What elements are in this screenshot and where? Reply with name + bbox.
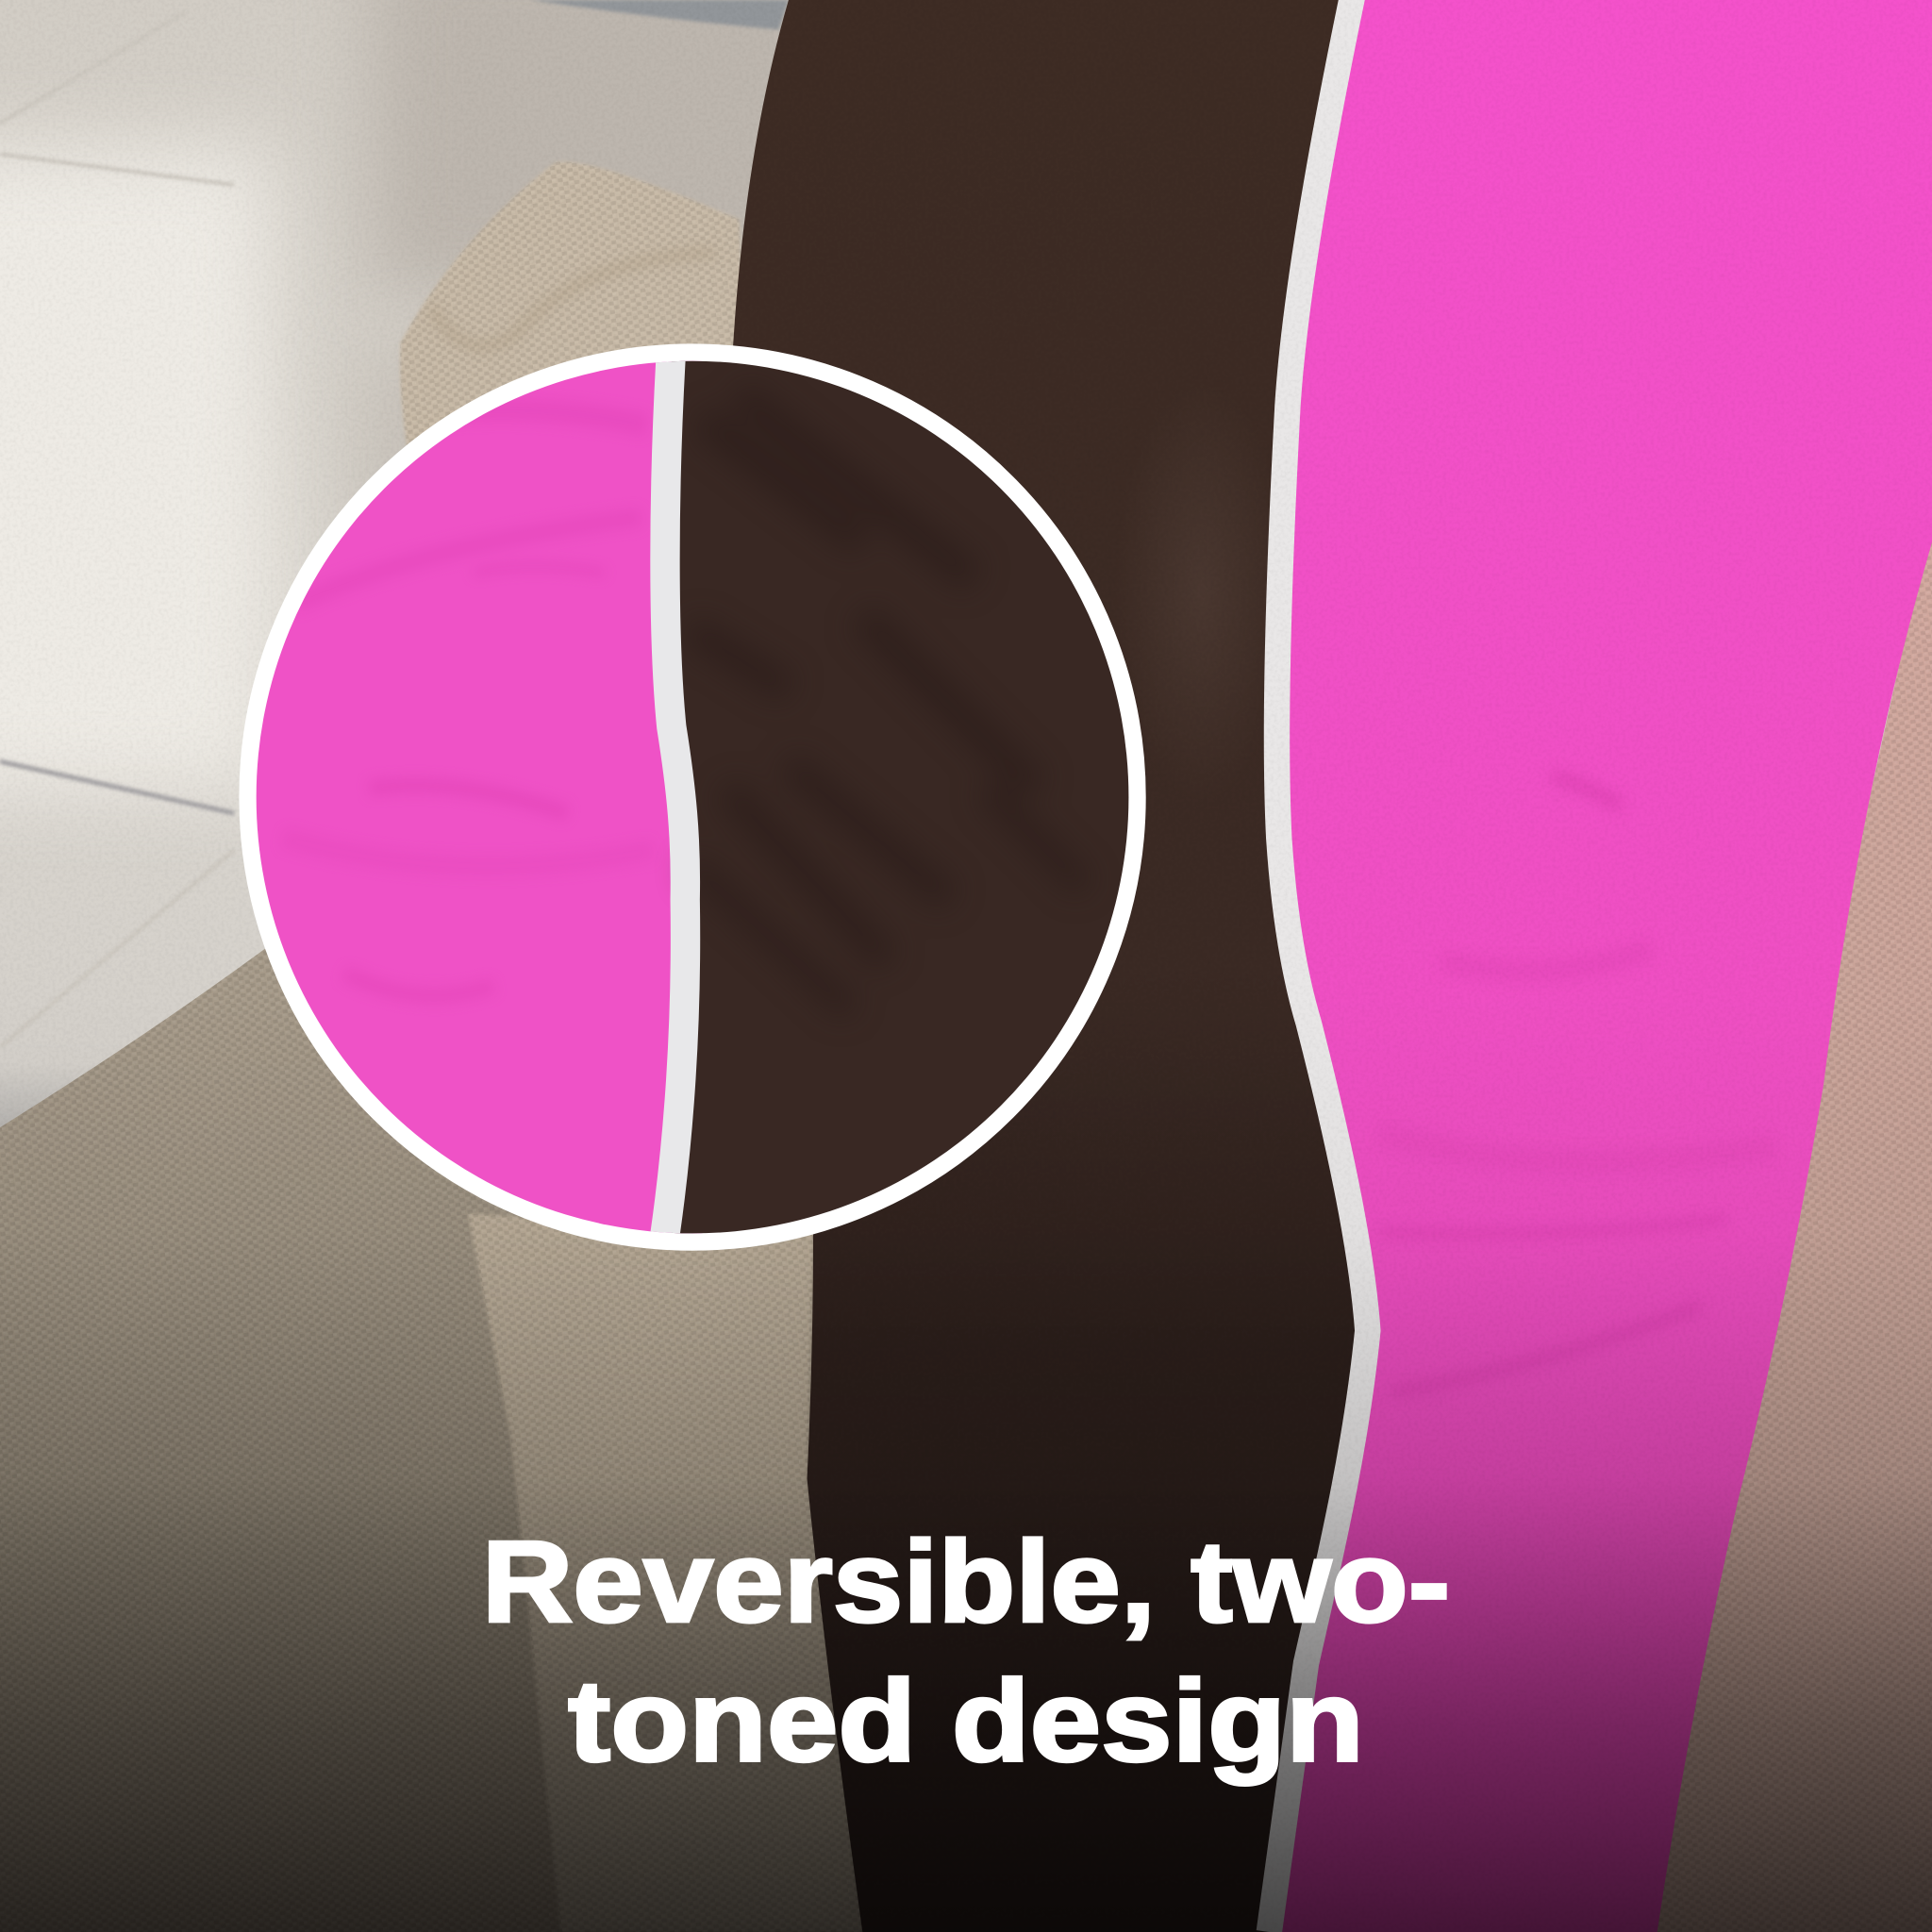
lighter cushion panel — [468, 1214, 862, 1932]
pink pillow — [1269, 0, 1932, 1932]
headline — [482, 1518, 1450, 1786]
white piping on pillow — [1269, 0, 1368, 1932]
zoomed white piping — [661, 345, 686, 1257]
magnified detail circle — [246, 345, 1164, 1257]
zoomed brown shading — [670, 868, 671, 874]
bottom dark gradient overlay — [0, 986, 1932, 1932]
pink fabric folds — [1380, 776, 1774, 1392]
beige cushion corner, upper — [400, 161, 752, 518]
right side woven fabric — [1626, 518, 1932, 1932]
zoomed pink fabric — [246, 345, 702, 1257]
headline line 2: toned design — [568, 1657, 1364, 1786]
headline line 1: Reversible, two- — [482, 1518, 1450, 1647]
circle white ring — [248, 353, 1138, 1242]
beige sofa — [0, 949, 862, 1932]
zoomed brown fabric — [672, 360, 1128, 1234]
zoomed fabric folds — [301, 398, 515, 606]
brown fabric highlight — [1115, 382, 1288, 801]
brown pillow — [733, 0, 1368, 1932]
